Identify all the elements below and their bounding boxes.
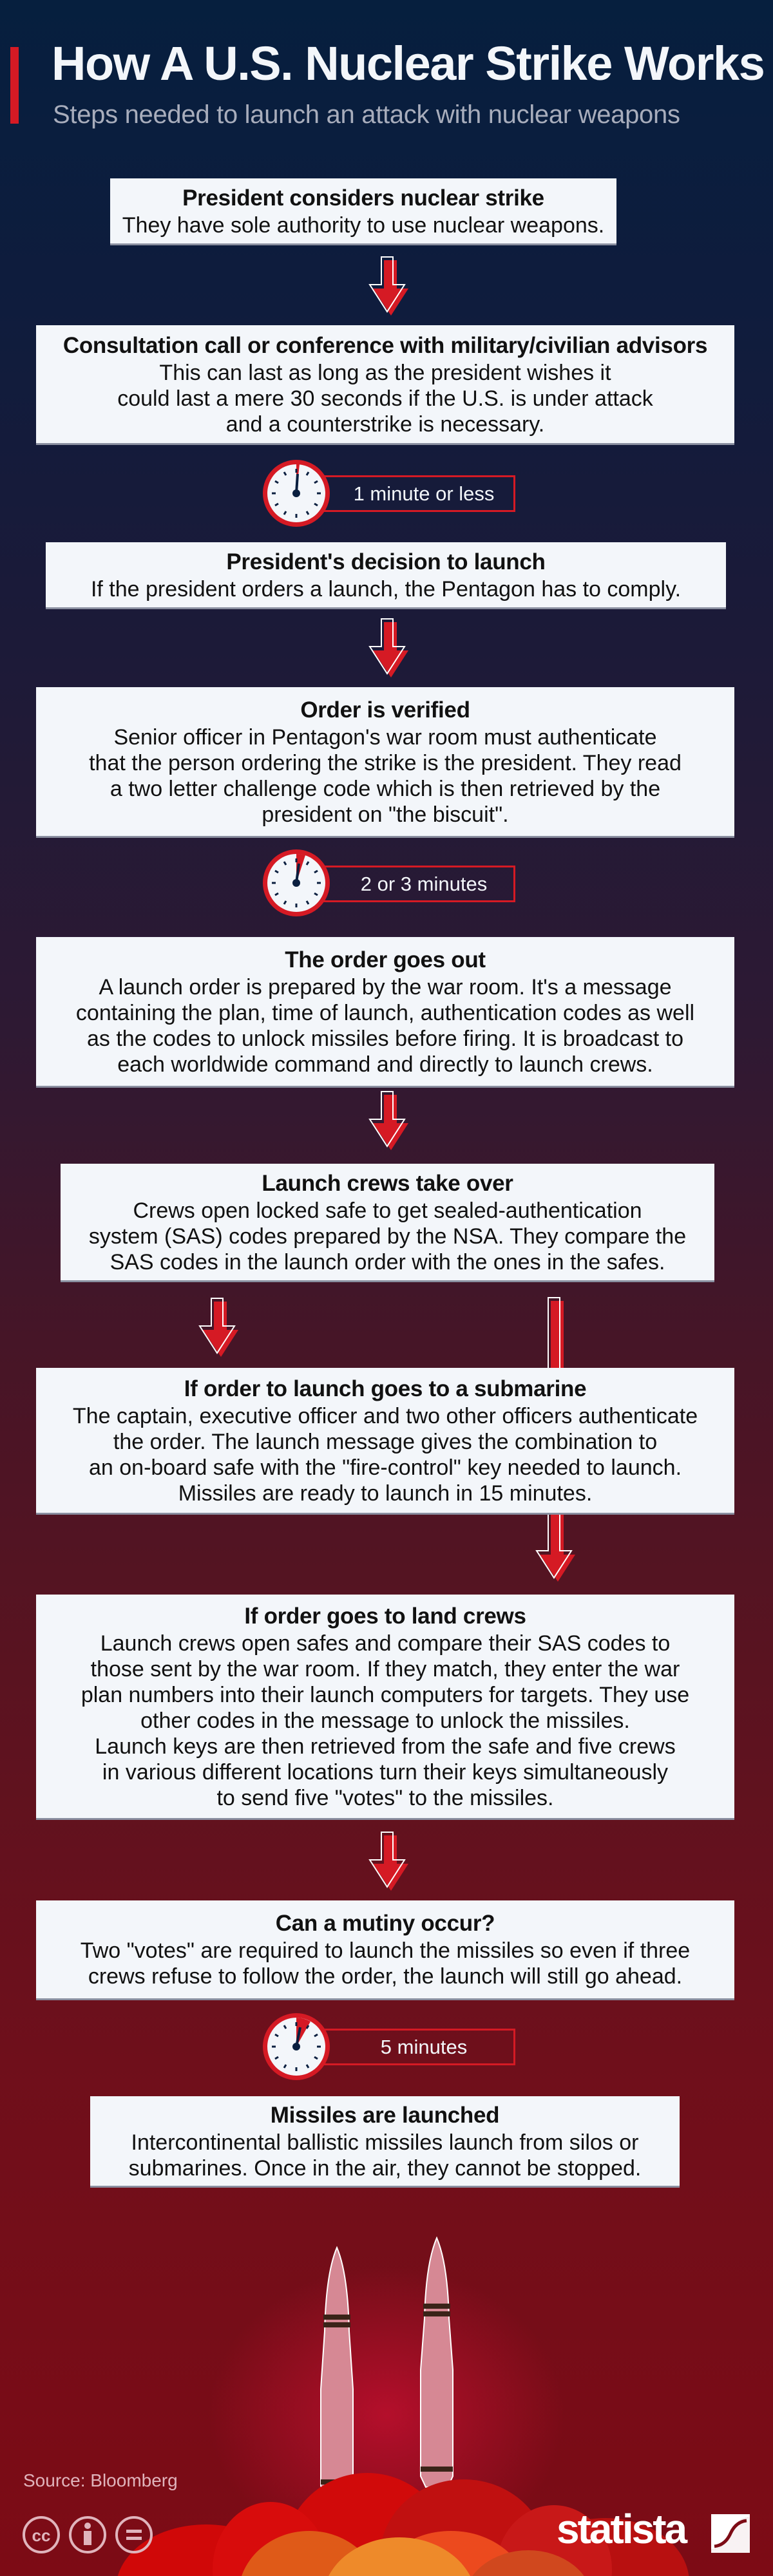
- smoke clouds: [116, 2473, 689, 2576]
- arrow 2: [368, 618, 408, 677]
- box: order verified: a two letter challenge code which is then retrieved by the: [110, 777, 660, 801]
- statista logo: [557, 2506, 750, 2553]
- box: launch crews: Crews open locked safe to get sealed-authentication: [133, 1198, 642, 1222]
- box: submarine: The captain, executive officer and two other officers authenticate: [73, 1404, 698, 1428]
- arrow 4: [368, 1832, 408, 1891]
- box: decision: [46, 542, 726, 609]
- box: submarine: Missiles are ready to launch in 15 minutes.: [178, 1481, 592, 1506]
- box: consultation: Consultation call or conference with military/civilian advisors: [63, 332, 707, 358]
- timing label 3: 5 minutes: [381, 2035, 467, 2058]
- timing label 2: [296, 866, 515, 902]
- box: missiles launched: Missiles are launched: [271, 2102, 499, 2128]
- box: missiles launched: Intercontinental ballistic missiles launch from silos or: [131, 2130, 638, 2155]
- box: submarine: an on-board safe with the "fire-control" key needed to launch.: [89, 1455, 682, 1480]
- box: order goes out: each worldwide command and directly to launch crews.: [117, 1052, 653, 1077]
- box: launch crews: [61, 1164, 714, 1282]
- box: president considers: [110, 178, 616, 245]
- missile right: [421, 2238, 453, 2518]
- box: president considers: They have sole authority to use nuclear weapons.: [122, 213, 604, 237]
- arrow 3: [368, 1091, 408, 1150]
- title accent bar: [10, 47, 19, 124]
- box: land crews: plan numbers into their launch computers for targets. They use: [81, 1682, 689, 1707]
- clock 2: [263, 849, 330, 916]
- statista logo: statista: [557, 2506, 685, 2552]
- box: order verified: that the person ordering the strike is the president. They read: [89, 751, 682, 775]
- timing label 2: 2 or 3 minutes: [361, 872, 487, 895]
- timing label 1: [296, 475, 515, 512]
- box: mutiny: Can a mutiny occur?: [276, 1911, 495, 1936]
- arrow 1: [368, 256, 408, 316]
- clock 3: [263, 2013, 330, 2080]
- box: order verified: [36, 687, 734, 838]
- arrow: long to land crews: [535, 1297, 575, 1582]
- box: consultation: This can last as long as the president wishes it: [159, 361, 611, 385]
- box: order goes out: The order goes out: [285, 947, 486, 972]
- box: consultation: could last a mere 30 seconds if the U.S. is under attack: [117, 386, 653, 411]
- box: mutiny: Two "votes" are required to launch the missiles so even if three: [81, 1938, 690, 1963]
- box: missiles launched: submarines. Once in the air, they cannot be stopped.: [129, 2156, 641, 2181]
- box: order goes out: containing the plan, time of launch, authentication codes as well: [76, 1001, 694, 1025]
- box: land crews: [36, 1595, 734, 1820]
- box: consultation: [36, 325, 734, 445]
- box: president considers: President considers nuclear strike: [182, 185, 544, 210]
- box: land crews: other codes in the message to unlock the missiles.: [140, 1708, 630, 1732]
- box: land crews: in various different locations turn their keys simultaneously: [102, 1759, 668, 1784]
- subtitle: Steps needed to launch an attack with nuclear weapons: [53, 100, 680, 129]
- box: order goes out: A launch order is prepared by the war room. It's a message: [99, 975, 672, 999]
- box: order goes out: [36, 937, 734, 1088]
- box: submarine: [36, 1368, 734, 1515]
- arrow: to submarine: [198, 1298, 238, 1357]
- box: missiles launched: [90, 2096, 680, 2188]
- box: launch crews: Launch crews take over: [262, 1171, 513, 1195]
- box: launch crews: system (SAS) codes prepared by the NSA. They compare the: [89, 1224, 686, 1248]
- source: Source: Bloomberg: [23, 2470, 178, 2490]
- box: order verified: Order is verified: [300, 697, 470, 723]
- box: decision: If the president orders a launch, the Pentagon has to comply.: [91, 577, 681, 601]
- box: submarine: the order. The launch message gives the combination to: [113, 1430, 657, 1454]
- missile left: [321, 2248, 353, 2505]
- license icons: [23, 2516, 153, 2553]
- timing label 3: [296, 2029, 515, 2065]
- box: launch crews: SAS codes in the launch order with the ones in the safes.: [110, 1249, 665, 1274]
- box: land crews: Launch crews open safes and compare their SAS codes to: [100, 1631, 670, 1655]
- box: order goes out: as the codes to unlock missiles before firing. It is broadcast to: [87, 1027, 683, 1051]
- box: order verified: president on "the biscuit".: [262, 802, 509, 827]
- box: land crews: Launch keys are then retrieved from the safe and five crews: [95, 1734, 676, 1758]
- box: land crews: those sent by the war room. If they match, they enter the war: [91, 1656, 680, 1681]
- clock 1: [263, 460, 330, 527]
- box: decision: President's decision to launch: [226, 549, 546, 574]
- box: submarine: If order to launch goes to a submarine: [184, 1376, 586, 1401]
- illustration: missiles and smoke: [117, 2236, 689, 2576]
- box: consultation: and a counterstrike is necessary.: [226, 412, 544, 437]
- box: land crews: to send five "votes" to the missiles.: [216, 1785, 554, 1810]
- title: How A U.S. Nuclear Strike Works: [52, 37, 764, 90]
- glow behind missiles: [193, 2254, 580, 2576]
- box: mutiny: crews refuse to follow the order, the launch will still go ahead.: [88, 1964, 682, 1989]
- box: land crews: If order goes to land crews: [244, 1604, 526, 1628]
- box: mutiny: [36, 1900, 734, 2000]
- timing label 1: 1 minute or less: [354, 482, 494, 505]
- box: order verified: Senior officer in Pentagon's war room must authenticate: [113, 725, 657, 750]
- license icons: cc: [32, 2526, 50, 2545]
